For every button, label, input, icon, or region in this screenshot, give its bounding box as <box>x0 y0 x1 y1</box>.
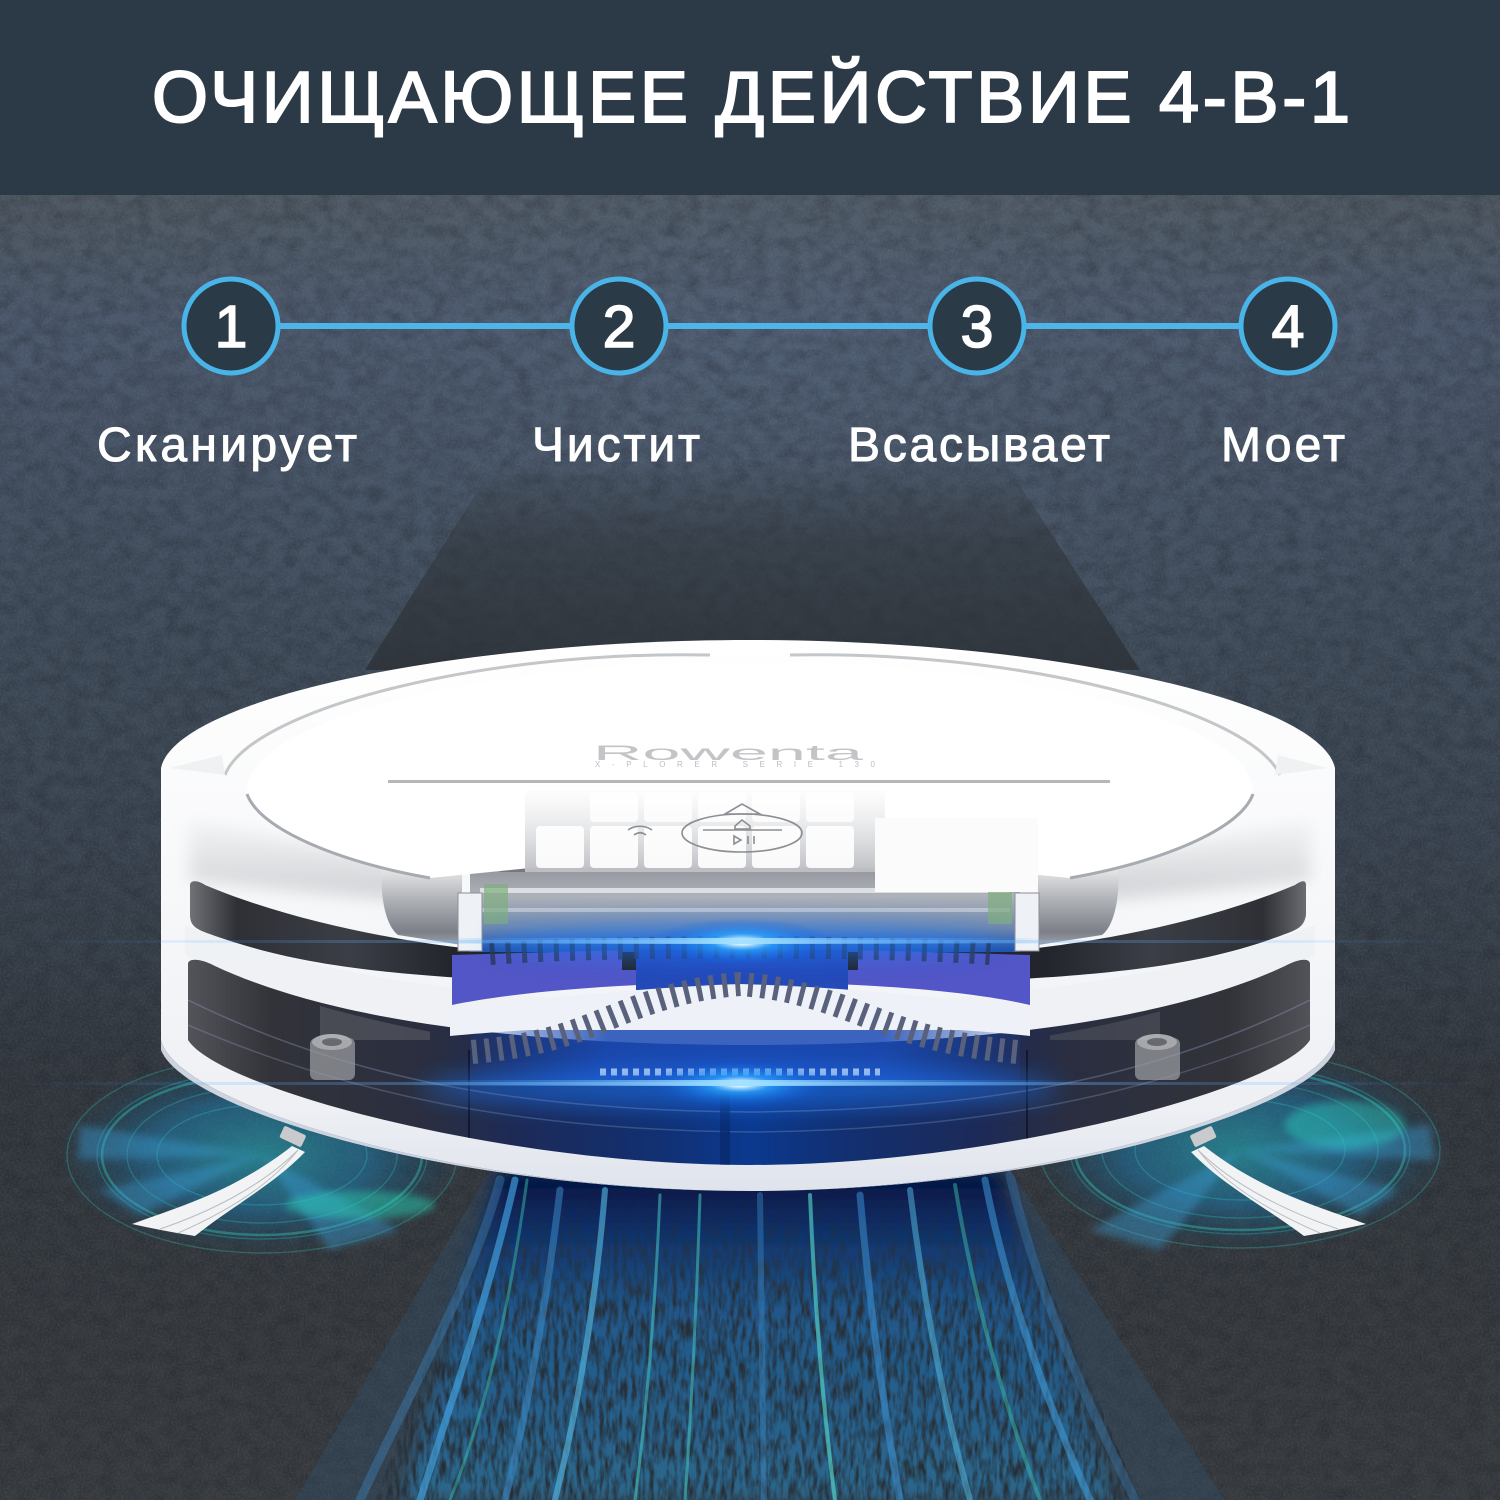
control buttons <box>628 804 802 852</box>
left wheel module <box>310 1034 355 1080</box>
internal chassis details <box>188 1000 1310 1165</box>
glow flare lower <box>0 1060 1500 1108</box>
right connector <box>988 884 1039 951</box>
floor cleaning streaks <box>280 1170 1240 1500</box>
left brush motor <box>382 868 462 945</box>
base shadow rim <box>161 1040 1335 1191</box>
left scanning rings <box>57 1055 467 1255</box>
top cover <box>170 655 1327 878</box>
roller white core <box>450 984 1030 1036</box>
upper bristles <box>490 947 990 954</box>
left side brush <box>132 1125 306 1236</box>
left connector <box>458 884 508 951</box>
mechanism highlights <box>480 862 1010 912</box>
brand logo: Rowenta <box>593 742 864 765</box>
step 2: Чистит <box>532 419 700 472</box>
lower bristles <box>472 984 1018 1052</box>
dust bin teeth <box>600 1068 880 1076</box>
step 1: 1 <box>215 294 247 360</box>
translucent side shading <box>190 820 1310 905</box>
right side brush <box>1190 1125 1366 1236</box>
upper roller <box>452 950 1030 1005</box>
step 4 <box>1221 279 1345 472</box>
top cover: X-PLORER SERIE 130 <box>595 760 876 769</box>
step 3 <box>848 279 1110 472</box>
glow flare upper <box>0 918 1500 966</box>
step 3: Всасывает <box>848 419 1110 472</box>
right wheel module <box>1135 1034 1180 1080</box>
header band <box>0 0 1500 195</box>
step 2: 2 <box>603 294 635 360</box>
right brush motor <box>1038 868 1118 945</box>
title: ОЧИЩАЮЩЕЕ ДЕЙСТВИЕ 4-В-1 <box>152 56 1350 138</box>
step timeline <box>97 279 1345 472</box>
robot body shell <box>161 640 1335 1191</box>
translucent panel tiles <box>525 790 885 872</box>
robot vacuum <box>0 640 1500 1191</box>
right scanning rings <box>1030 1050 1450 1250</box>
step 1 <box>97 279 357 472</box>
step 2 <box>532 279 700 472</box>
lower window <box>188 960 1310 1165</box>
step 4: Моет <box>1221 419 1345 472</box>
step 3: 3 <box>961 294 993 360</box>
white band between windows <box>185 925 1315 1055</box>
upper window band <box>190 881 1306 985</box>
right top block <box>875 818 1038 892</box>
step 1: Сканирует <box>97 419 357 472</box>
bottom blue band <box>470 1030 1020 1080</box>
step 4: 4 <box>1272 294 1304 360</box>
center mechanical section <box>470 860 1020 952</box>
